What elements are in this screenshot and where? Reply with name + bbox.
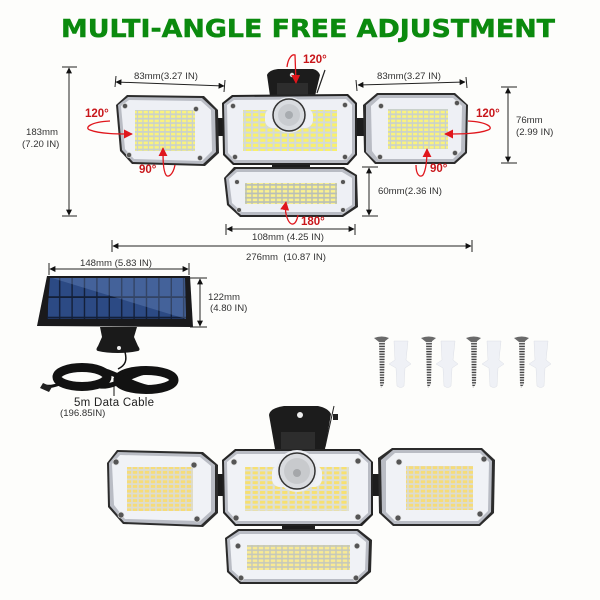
right lamp panel xyxy=(363,93,468,164)
rotation: right 120 degrees xyxy=(445,108,500,134)
dimension: bottom panel height xyxy=(362,167,442,216)
dimension: panel height: 76mm xyxy=(516,115,543,126)
screw 1 xyxy=(374,336,389,388)
left lamp panel xyxy=(116,95,219,166)
rotation: top 120 degrees xyxy=(287,54,327,83)
dimension: center width xyxy=(226,224,355,243)
panel stand xyxy=(96,327,140,353)
title: MULTI-ANGLE FREE ADJUSTMENT xyxy=(61,14,555,43)
dimension: right panel width: 83mm(3.27 IN) xyxy=(377,71,441,82)
anchor 4 xyxy=(529,341,551,388)
solar panel xyxy=(37,276,193,396)
anchor 2 xyxy=(436,341,458,388)
dimension: solar width xyxy=(49,258,189,275)
dimension: left panel width xyxy=(115,71,225,92)
dimension: panel height xyxy=(501,87,553,163)
cable plug xyxy=(40,383,52,392)
front left panel xyxy=(107,450,218,527)
dimension: total width: 276mm (10.87 IN) xyxy=(246,252,326,263)
dimension: panel height: (2.99 IN) xyxy=(516,127,553,138)
screws and wall anchors xyxy=(374,336,551,388)
front bracket xyxy=(269,406,338,449)
dimension: total height: (7.20 IN) xyxy=(22,139,59,150)
screw 4 xyxy=(514,336,529,388)
front right panel xyxy=(378,448,495,526)
rotation: left 120 degrees: 120° xyxy=(85,108,109,120)
dimension: solar height xyxy=(190,278,247,327)
rotation: left 90 degrees xyxy=(139,148,175,176)
dimension: total height: 183mm xyxy=(26,127,58,138)
panel frame xyxy=(37,276,193,327)
data cable coil xyxy=(46,352,174,396)
rotation: right 120 degrees: 120° xyxy=(476,108,500,120)
rotation: top 120 degrees: 120° xyxy=(303,54,327,66)
front bottom panel xyxy=(225,529,372,584)
lamp front view: bottom product photo xyxy=(107,406,495,584)
front center panel xyxy=(222,449,373,526)
center lamp panel xyxy=(222,94,357,165)
cable label xyxy=(60,397,154,419)
mounting bracket xyxy=(267,69,325,96)
dimension: solar height: 122mm xyxy=(208,292,240,303)
screw 2 xyxy=(421,336,436,388)
dimension: solar width: 148mm (5.83 IN) xyxy=(80,258,152,269)
rotation: right 90 degrees xyxy=(416,149,448,176)
dimension: total width xyxy=(112,240,472,263)
anchor 3 xyxy=(482,341,504,388)
dimension: left panel width: 83mm(3.27 IN) xyxy=(134,71,198,82)
dimension: bottom panel height: 60mm(2.36 IN) xyxy=(378,186,442,197)
dimensioned lamp: top product diagram xyxy=(116,69,468,217)
rotation: 180 degrees: 180° xyxy=(301,216,325,228)
rotation: left 90 degrees: 90° xyxy=(139,164,157,176)
cable label: 5m Data Cable xyxy=(74,397,154,409)
dimension: right panel width xyxy=(356,71,467,91)
dimension: total height xyxy=(22,67,77,216)
dimension: solar height: (4.80 IN) xyxy=(210,303,247,314)
side hinges xyxy=(216,118,365,169)
screw 3 xyxy=(466,336,481,388)
cable label: (196.85IN) xyxy=(60,408,105,419)
front motion sensor xyxy=(276,450,318,492)
solar cells xyxy=(47,278,186,319)
rotation: right 90 degrees: 90° xyxy=(430,163,448,175)
dimension: center width: 108mm (4.25 IN) xyxy=(252,232,324,243)
rotation: 180 degrees xyxy=(285,202,325,228)
bottom lamp panel xyxy=(224,167,358,217)
front hinges xyxy=(215,474,381,530)
motion sensor xyxy=(271,97,307,133)
anchor 1 xyxy=(389,341,411,388)
rotation: left 120 degrees xyxy=(85,108,132,134)
